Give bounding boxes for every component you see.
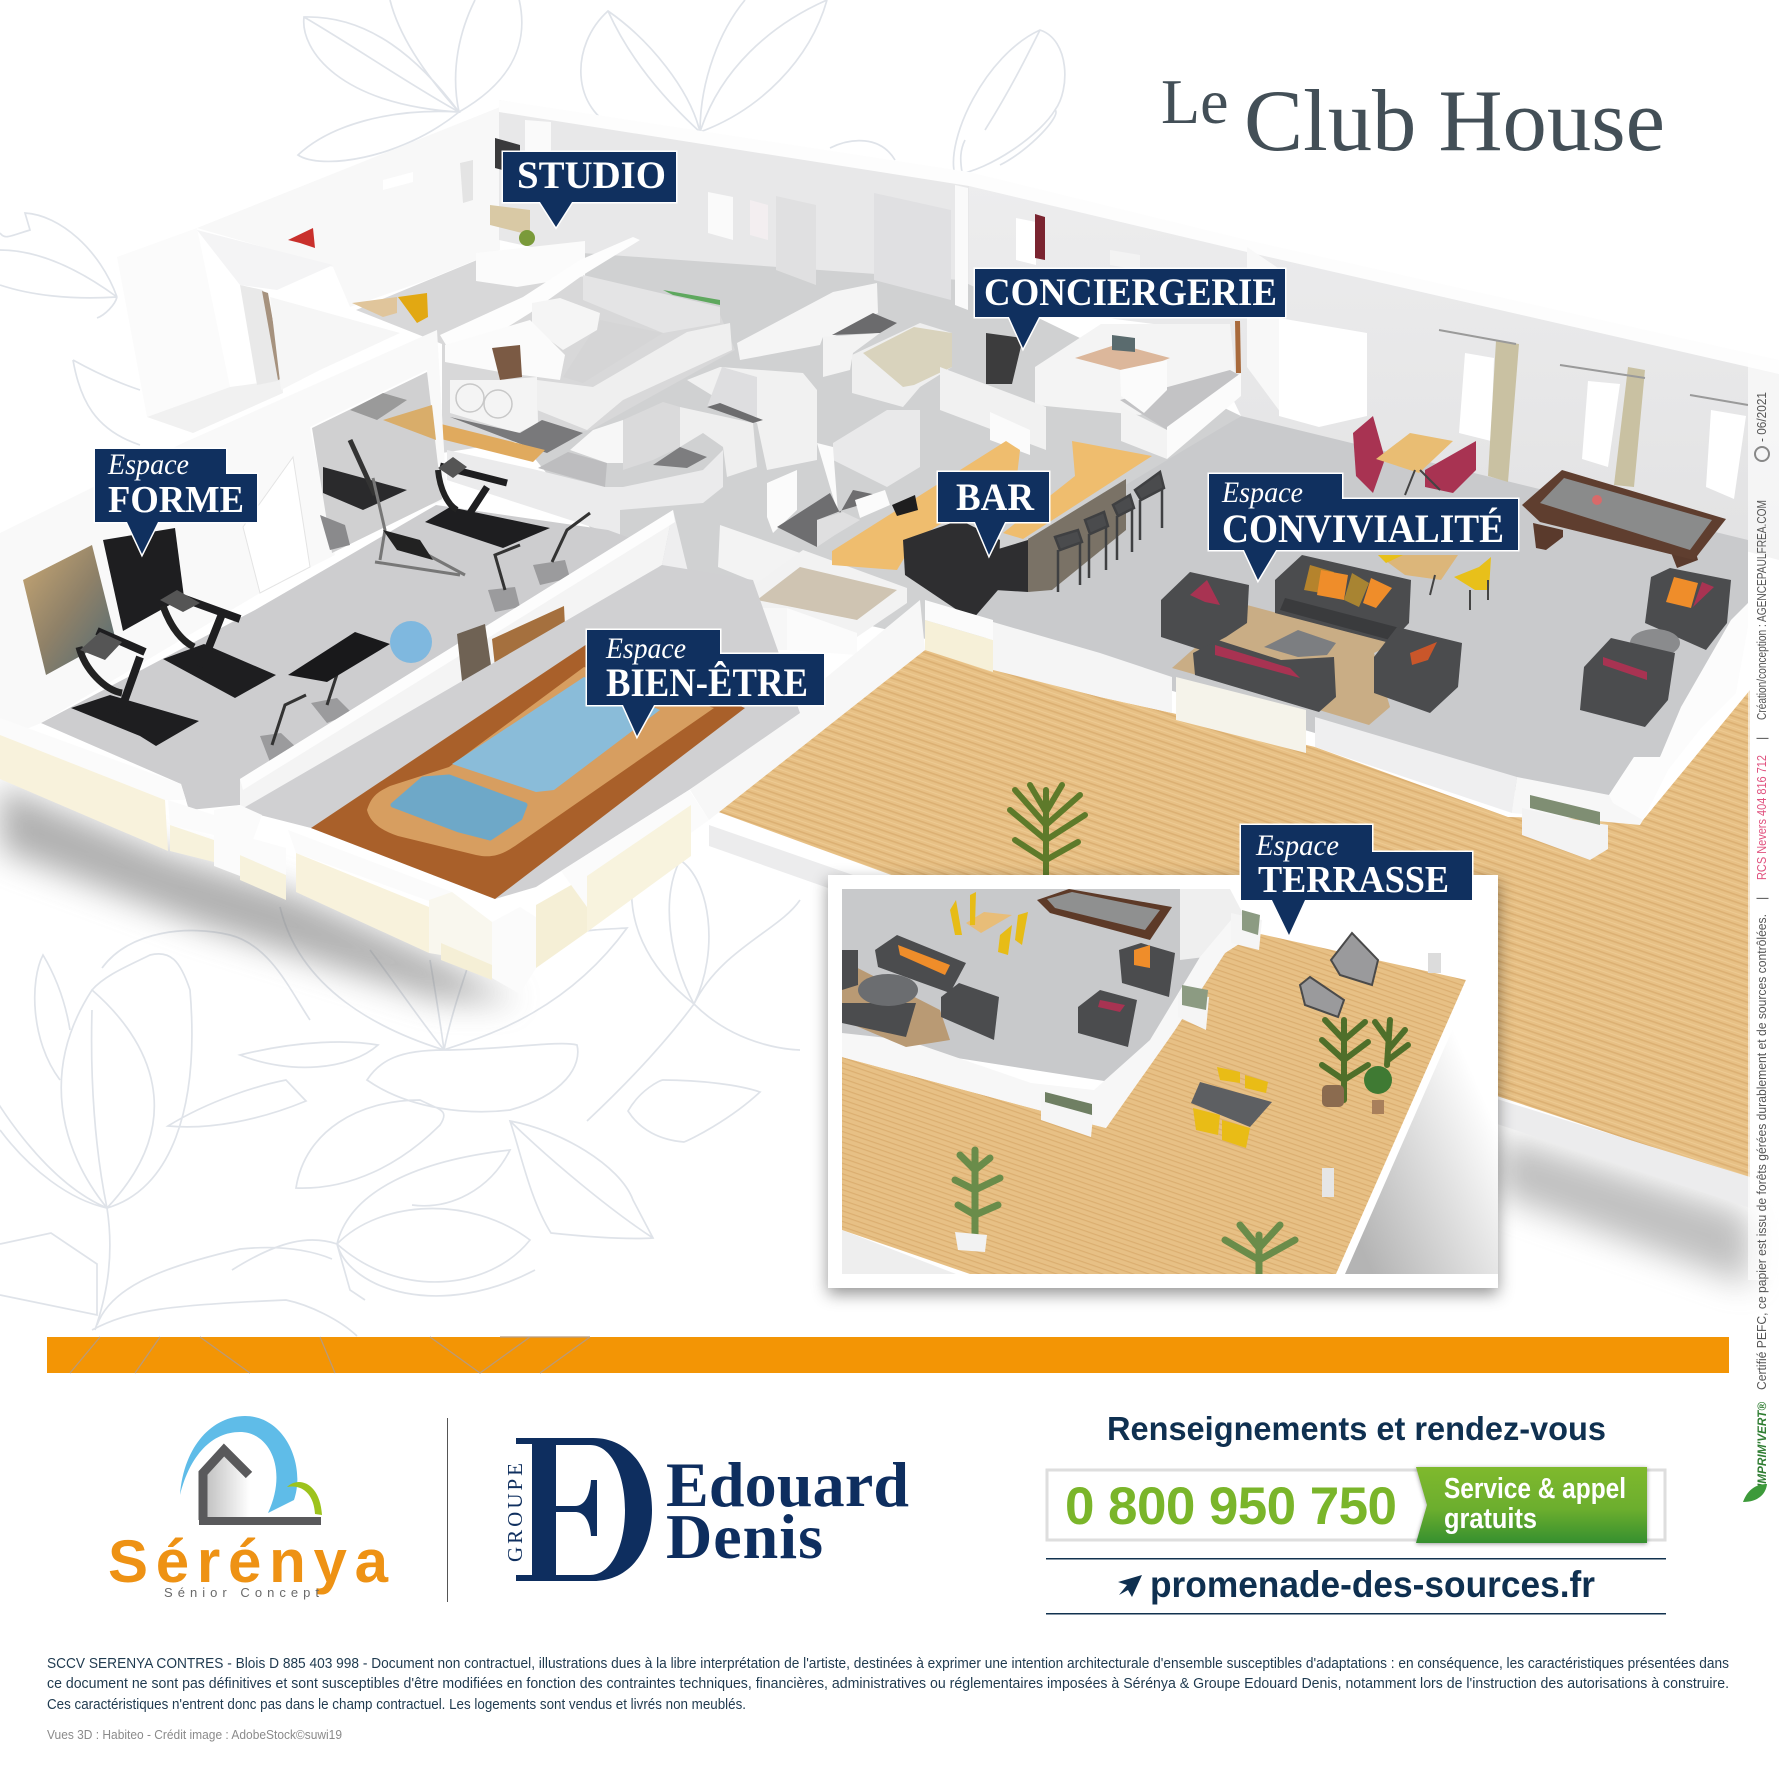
label: bar: BAR [956, 476, 1035, 519]
studio inner wall [583, 275, 720, 333]
phone box [1047, 1467, 1665, 1543]
pool deck [311, 644, 745, 899]
corner wall piece [1512, 777, 1643, 825]
reception white unit [1035, 324, 1235, 415]
pool front wall top [288, 830, 452, 905]
basket [492, 345, 522, 380]
gym back wall [0, 330, 447, 740]
conciergerie walls [940, 367, 1241, 459]
sauna interior [757, 567, 897, 620]
logo: Sérénya: Sénior Concept [164, 1585, 319, 1600]
poster: black muscle [103, 528, 184, 631]
imprim'vert mark [1743, 1402, 1769, 1502]
back wall, conciergerie and lounge [969, 181, 1779, 560]
back sofa [1275, 555, 1411, 643]
armchair far right [1645, 568, 1731, 650]
terrace deck [713, 650, 1750, 1180]
pool front wall cream [296, 853, 429, 953]
pool frame [367, 667, 714, 856]
wall to terrace [690, 600, 925, 820]
bar stools [1055, 472, 1164, 592]
yellow chairs table [1378, 555, 1491, 610]
office floor [1120, 370, 1241, 430]
studio counter [445, 320, 565, 380]
logo: Groupe Edouard Denis: Edouard [666, 1449, 909, 1520]
desk top [1075, 344, 1170, 373]
washers [450, 377, 538, 433]
label: espace forme: Espace [107, 448, 189, 481]
pool room partition end [662, 510, 690, 580]
glass panels [1315, 717, 1517, 813]
terrace outer edge [709, 825, 1750, 1208]
door frame [262, 291, 283, 380]
imprim'vert mark: IMPRIM'VERT® [1755, 1402, 1769, 1487]
mirror [312, 372, 442, 553]
sauna box [743, 550, 907, 653]
white column [525, 120, 551, 158]
back wall details [383, 138, 1140, 310]
vertical print notes: RCS Nevers 404 816 712 [1755, 755, 1769, 880]
inset frame [828, 875, 1498, 1288]
spa basin [393, 777, 525, 838]
monitor [1112, 335, 1135, 352]
badge: free service: gratuits [1444, 1503, 1537, 1535]
armchair left [1161, 572, 1249, 650]
label: espace terrasse: Espace [1255, 829, 1339, 862]
title: Le [1161, 66, 1228, 137]
icon: ED monogram [516, 1438, 652, 1581]
label: studio [503, 152, 676, 227]
label: espace convivialité [1209, 474, 1518, 580]
corner pieces [429, 876, 587, 994]
bar dark unit left [903, 520, 1000, 620]
studio floor [356, 253, 735, 453]
planter [1522, 795, 1608, 860]
desk base [1120, 360, 1167, 413]
armchair near [1580, 638, 1675, 727]
wooden cabinet [492, 606, 566, 685]
bar stone facing [1028, 479, 1126, 592]
inner block wall [270, 297, 400, 390]
badge: free service [1416, 1467, 1647, 1543]
wall toward terrace [561, 790, 709, 907]
icon: blue arc [180, 1416, 297, 1513]
label: espace terrasse [1241, 825, 1472, 935]
palm on terrace [1010, 785, 1085, 875]
brown strip [1235, 321, 1241, 373]
label: conciergerie: CONCIERGERIE [984, 271, 1277, 314]
wall base [147, 380, 283, 433]
elliptical [373, 478, 465, 575]
label: bar [938, 472, 1049, 555]
wood bench [385, 410, 545, 462]
website [1046, 1558, 1666, 1614]
logo: Groupe Edouard Denis [503, 1438, 909, 1581]
treadmill 2 [160, 590, 276, 698]
right low wall [1609, 603, 1748, 820]
corridor wall [447, 450, 723, 537]
gym floor [41, 505, 663, 810]
wall cream facing [587, 805, 691, 932]
lounge floor [930, 416, 1748, 795]
center rooms [538, 283, 920, 547]
side table [1630, 629, 1680, 657]
bar dark unit right [995, 540, 1028, 592]
left outer block [117, 228, 230, 417]
label: espace terrasse: TERRASSE [1258, 859, 1449, 901]
vertical print notes: Certifié PEFC, ce papier est issu de forêts gérées durablement et de sources contrôlées. [1755, 914, 1769, 1390]
logo divider [447, 1418, 448, 1602]
back wall, studio [499, 100, 969, 320]
beige sofa [863, 327, 952, 387]
orange band [47, 1337, 1729, 1373]
gym ball [390, 621, 432, 663]
back wall top edge [499, 100, 1779, 374]
white bed box [532, 298, 600, 350]
wall block [1247, 247, 1281, 413]
label: espace forme: FORME [108, 479, 244, 521]
label: espace bien-être [587, 630, 824, 736]
label: espace bien-être: Espace [605, 632, 686, 665]
studio partition top [440, 237, 640, 360]
label: espace forme [95, 448, 257, 554]
yellow chair [398, 293, 428, 323]
icon: leaf [1743, 1484, 1767, 1502]
legal text: Ces caractéristiques n'entrent donc pas dans le champ contractuel. Les logements sont vendus et livrés non meublés. [47, 1696, 746, 1713]
label: studio: STUDIO [517, 154, 666, 197]
icon: house [199, 1450, 321, 1525]
studio kitchen [476, 241, 585, 287]
logo: Groupe Edouard Denis: Denis [666, 1501, 823, 1572]
logo: Groupe Edouard Denis: GROUPE [503, 1463, 527, 1562]
yoga mat [288, 632, 390, 682]
icon: green arc [287, 1482, 322, 1515]
grey pool room floor [240, 565, 800, 899]
inset view: terrace [828, 875, 1498, 1288]
bed green [663, 290, 720, 305]
bathroom partition front [537, 323, 732, 430]
dark floor [450, 417, 583, 453]
poster: sport photo [23, 545, 115, 675]
armchair right [1374, 627, 1462, 713]
conciergerie dark cabinet [986, 333, 1023, 384]
window [243, 457, 310, 593]
label: espace convivialité: CONVIVIALITÉ [1222, 506, 1504, 551]
logo: Sérénya: Sérénya [108, 1528, 389, 1595]
floor plan: 3D view of the club house [0, 100, 1779, 1280]
sofa box conciergerie [852, 323, 952, 407]
vertical print notes: | [1755, 737, 1769, 740]
legal text [47, 1655, 1729, 1713]
notch and pillar [168, 800, 286, 900]
vertical print notes: - 06/2021 [1755, 392, 1769, 442]
raised block [1176, 677, 1306, 753]
treadmill 1 [71, 631, 199, 746]
desk [352, 297, 397, 317]
shelf unit [457, 624, 495, 700]
wall partition near sauna [718, 525, 800, 597]
bar cooktop [892, 495, 918, 516]
wall beside door [787, 608, 857, 655]
phone box: 0 800 950 750 [1065, 1477, 1397, 1536]
front wall left of lounge [993, 622, 1172, 713]
website: promenade-des-sources.fr [1150, 1564, 1595, 1605]
vertical print notes [1755, 392, 1769, 1390]
image credits: Vues 3D : Habiteo - Crédit image : AdobeStock©suwi19 [47, 1727, 342, 1742]
dining table with red chairs [1353, 416, 1476, 495]
front sofa [1193, 640, 1336, 712]
windows and curtains [1439, 330, 1748, 499]
gym front wall [0, 718, 186, 800]
badge: free service: Service & appel [1444, 1473, 1626, 1505]
logo: Sérénya [108, 1416, 389, 1600]
inset scene [842, 889, 1498, 1274]
plant [519, 230, 535, 246]
label: conciergerie [975, 269, 1285, 348]
washer doors [456, 384, 512, 418]
central floor [440, 250, 1241, 640]
gym front wall cream [0, 735, 168, 851]
red cushion [288, 228, 315, 248]
large window [1279, 318, 1367, 427]
contact heading: Renseignements et rendez-vous [1107, 1410, 1606, 1447]
icon: arrow [1118, 1575, 1142, 1597]
cream stub wall [925, 620, 993, 672]
treadmill 3 [425, 457, 550, 548]
vertical print notes: Création/conception : AGENCEPAULFREA.COM [1755, 500, 1769, 720]
low wall between gym and pool [240, 510, 673, 810]
bar counter left [832, 441, 1020, 570]
inner block top [197, 230, 333, 290]
wall top stub [925, 600, 993, 640]
vertical print notes: | [1755, 897, 1769, 900]
bar counter right [1003, 441, 1152, 539]
billiard table [1522, 470, 1726, 568]
label: espace bien-être: BIEN-ÊTRE [606, 660, 808, 705]
pool basin [452, 677, 660, 792]
door [742, 608, 787, 650]
studio room floor [563, 320, 663, 383]
building shadow [0, 785, 1750, 1285]
side strip overlay [1748, 360, 1779, 1280]
exercise bikes [260, 513, 590, 762]
coffee table [1264, 630, 1336, 657]
low wall top [240, 510, 675, 790]
back wall, left block [197, 107, 500, 307]
title: Club House [1244, 73, 1665, 170]
rug [1172, 605, 1395, 725]
door opening [240, 285, 282, 385]
background: magnolia line art [0, 0, 1065, 1336]
label: espace convivialité: Espace [1221, 476, 1303, 509]
